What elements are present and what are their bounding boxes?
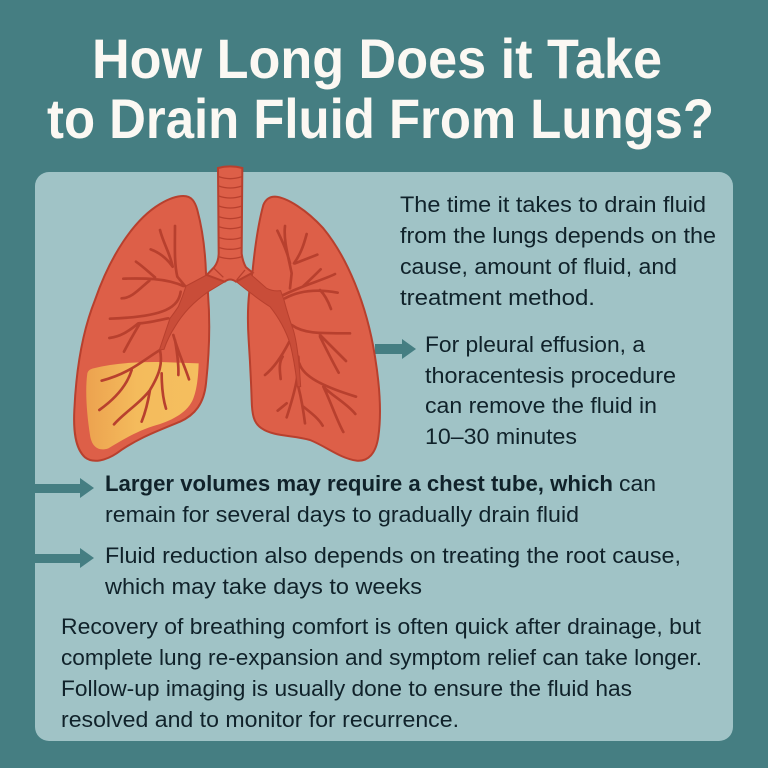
title: [47, 27, 714, 150]
text: recovery summary: Recovery of breathing comfort is often quick after drainage, but: [61, 614, 701, 639]
text: recovery summary: Follow-up imaging is usually done to ensure the fluid has: [61, 676, 632, 701]
right lung: [248, 197, 380, 461]
illustration: lungs with fluid: [74, 166, 380, 461]
text: pleural effusion: thoracentesis procedure: [425, 363, 676, 388]
fluid: [86, 362, 199, 449]
text: recovery summary: [61, 614, 702, 732]
text: root cause: Fluid reduction also depends on treating the root cause,: [105, 543, 681, 568]
intro text: [400, 192, 716, 310]
arrow: lungs to pleural effusion: [375, 339, 416, 359]
text: chest tube: Larger volumes may require a chest tube, which: [105, 471, 613, 496]
text: recovery summary: complete lung re-expansion and symptom relief can take longer.: [61, 645, 702, 670]
text: root cause: [104, 543, 681, 599]
text: root cause: which may take days to weeks: [104, 574, 422, 599]
panel: content background: [35, 172, 733, 741]
intro text: The time it takes to drain fluid: [400, 192, 706, 217]
title: to Drain Fluid From Lungs?: [47, 87, 714, 150]
right bronchial tree: [265, 226, 356, 432]
right main bronchus: [235, 269, 301, 387]
left lung: [74, 196, 209, 461]
text: pleural effusion: For pleural effusion, a: [425, 332, 646, 357]
trachea: [207, 166, 253, 282]
left main bronchus: [159, 275, 225, 350]
text: pleural effusion: can remove the fluid in: [425, 393, 657, 418]
text: chest tube: [105, 471, 656, 527]
text: chest tube: remain for several days to gradually drain fluid: [105, 502, 579, 527]
intro text: from the lungs depends on the: [400, 223, 716, 248]
arrow: chest tube: [35, 478, 94, 498]
text: pleural effusion: [425, 332, 676, 449]
intro text: treatment method.: [400, 285, 595, 310]
text: pleural effusion: 10–30 minutes: [425, 424, 577, 449]
title: How Long Does it Take: [92, 27, 662, 90]
arrow: root cause: [35, 548, 94, 568]
text: chest tube: can: [619, 471, 656, 496]
text: recovery summary: resolved and to monitor for recurrence.: [61, 707, 459, 732]
intro text: cause, amount of fluid, and: [400, 254, 677, 279]
left bronchial tree: [99, 226, 189, 424]
